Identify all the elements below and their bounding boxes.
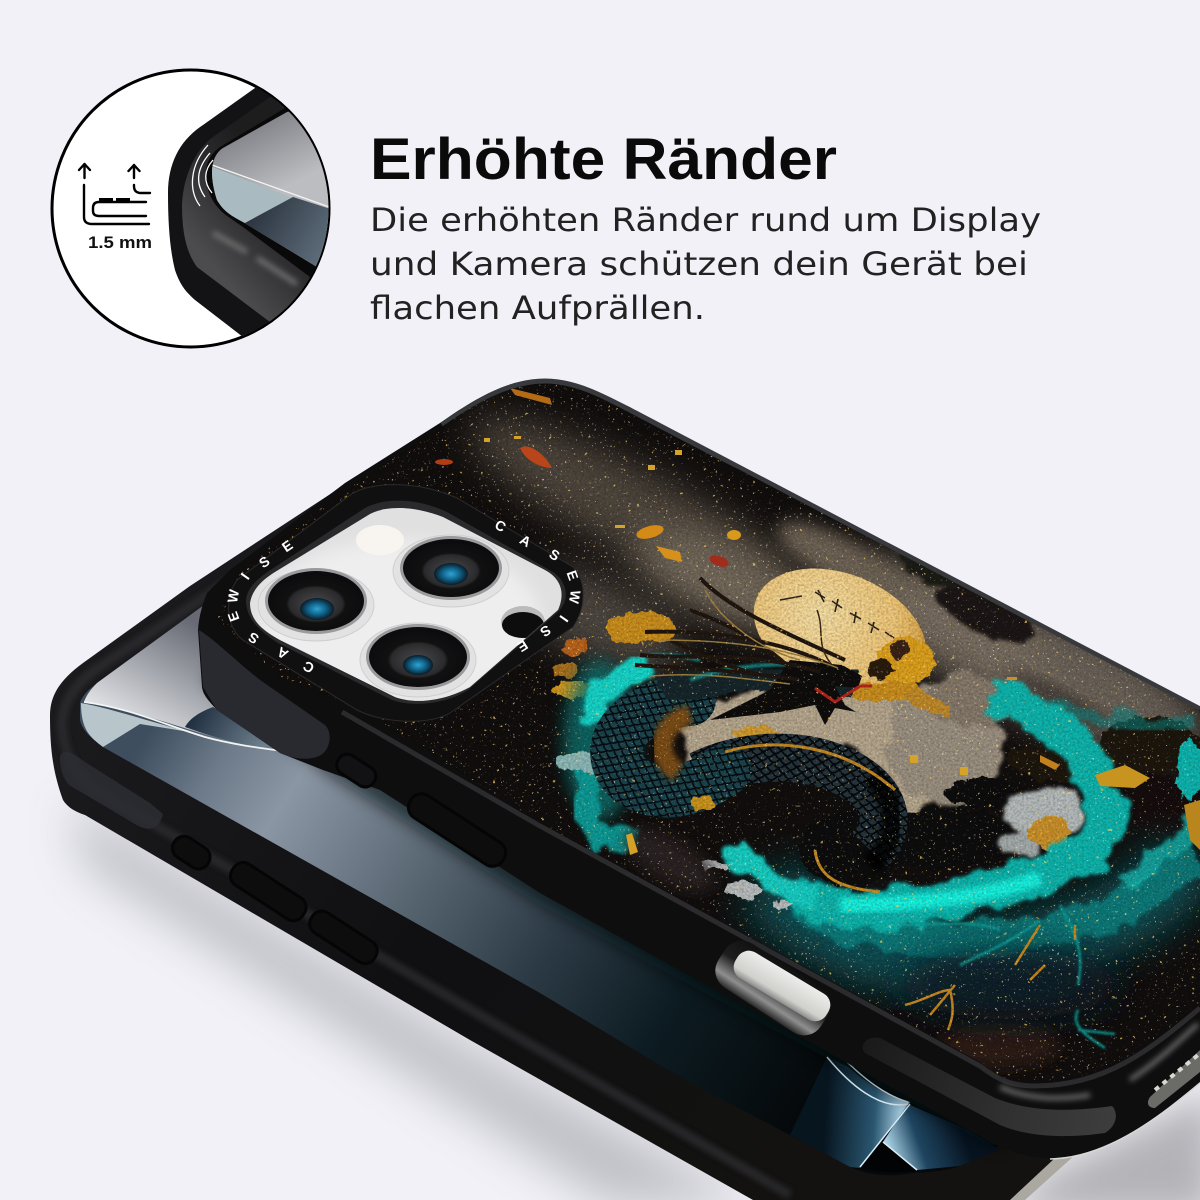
- lens top: [400, 536, 502, 600]
- circle white disc: [52, 70, 329, 347]
- dragon body lower curve: [700, 758, 884, 850]
- close-up phone corner: [168, 60, 345, 345]
- brand text: right side of ring: I: [556, 613, 572, 625]
- close-up gloss highlights: [213, 233, 297, 284]
- dragon brown belly: [662, 715, 690, 772]
- gold speckle: [200, 370, 1200, 1100]
- white spray: [703, 860, 792, 910]
- dragon hair gold highlights: [650, 590, 838, 684]
- dragon gold rims: [725, 745, 895, 892]
- front phone: black case with dragon artwork: [198, 370, 1200, 1159]
- dragon neck mane: [665, 674, 855, 695]
- brand text: right side of ring: W: [566, 589, 584, 606]
- display wallpaper: blue light panel left: [790, 1057, 910, 1168]
- flash: [356, 525, 404, 555]
- dark lower field with brown spots: [617, 818, 1120, 1067]
- brand text: right side of ring: S: [537, 622, 554, 641]
- camera ring outer: [229, 485, 583, 721]
- display wallpaper: white highlight curve: [84, 702, 282, 751]
- brand text: right side of ring: A: [517, 531, 534, 550]
- dragon body upper curve: [616, 700, 725, 791]
- charging port surround: [708, 933, 838, 1043]
- teal wave: bright core: [840, 878, 1040, 905]
- icon: raised edge height diagram: [79, 164, 150, 224]
- lens left ring: [258, 569, 374, 641]
- description text: [370, 201, 1041, 327]
- speaker edge on the right: [1148, 1050, 1200, 1108]
- pale foam top left: [556, 750, 594, 775]
- art base: [442, 386, 1199, 711]
- back phone button: volume up: [226, 858, 310, 925]
- dark area inside dragon coil: [800, 814, 900, 886]
- dragon artwork panel: [200, 370, 1200, 1100]
- back phone frame sheen: [62, 580, 790, 1195]
- frame lighter rim along the lower edge: [342, 712, 1200, 1086]
- icon label: 1.5 mm: [88, 233, 152, 252]
- gold splashes around moon: [551, 612, 952, 740]
- brand text: right side of ring: [492, 516, 584, 656]
- impact arcs: [192, 145, 213, 206]
- display wallpaper: black triangle: [860, 1142, 917, 1172]
- display wallpaper: blue light panel right: [883, 1104, 1000, 1170]
- thin light edge below front phone: [1050, 1083, 1200, 1159]
- lens left: [265, 568, 367, 634]
- teal wave: upper fan: [1000, 698, 1195, 725]
- phone behind: black case seen from the display side: [50, 470, 1075, 1200]
- white foam: [992, 784, 1087, 857]
- display wallpaper: bright curved lines: [827, 1057, 917, 1170]
- moon calligraphy strokes: [780, 590, 894, 638]
- brand text: right side of ring: S: [546, 545, 563, 564]
- back phone button: volume down: [305, 907, 381, 968]
- description text: Die erhöhten Ränder rund um Display: [370, 201, 1041, 239]
- lens top ring: [393, 535, 509, 607]
- camera ring inner slope: [246, 501, 566, 704]
- brand text: right side of ring: C: [492, 516, 509, 535]
- brand text: left side of ring: A: [274, 644, 291, 663]
- back phone carbon grip strip: [60, 752, 163, 829]
- teal wave: outer dark band: [795, 855, 1196, 940]
- teal wave at far right: [1177, 740, 1200, 800]
- white speckle: [200, 370, 1200, 1100]
- dragon body shade: [870, 775, 892, 865]
- gold claw: [694, 796, 716, 810]
- dragon mouth: [815, 686, 872, 702]
- beige cloud below moon: [680, 674, 1025, 815]
- front phone frame: [198, 379, 1200, 1158]
- brand text: left side of ring: W: [224, 587, 242, 604]
- dragon hair strands: [635, 578, 845, 680]
- teal glow left of dragon: [564, 660, 636, 820]
- back phone button: action: [168, 832, 214, 873]
- back phone bottom silver edge: [1010, 1155, 1075, 1200]
- moon whisker: [817, 610, 832, 665]
- display wallpaper: navy panel: [185, 707, 285, 752]
- camera module white plate: [240, 495, 580, 715]
- soft shadows below the phones: [70, 800, 1200, 1200]
- moon: [754, 568, 926, 685]
- teal glow beneath wave: [770, 860, 1190, 960]
- lens bottom ring: [360, 623, 476, 697]
- bottom corner grip strip: [863, 1037, 1116, 1136]
- brand text: right side of ring: E: [514, 637, 531, 656]
- front phone button: side button: [404, 789, 510, 871]
- teal wave: main swirl: [790, 695, 1107, 909]
- mane teal highlights: [650, 655, 820, 680]
- orange glow in foam: [1028, 816, 1072, 848]
- dark rocks: [875, 717, 1200, 868]
- brand text: left side of ring: C: [300, 658, 317, 677]
- teal tendrils low: [900, 905, 1115, 1048]
- lens bottom: [366, 624, 470, 690]
- detail circle: raised edge close-up: [52, 60, 345, 347]
- brand text: right side of ring: E: [564, 568, 582, 582]
- display wallpaper: pale area below the highlight: [81, 703, 190, 747]
- teal wave: right side streak: [1120, 815, 1195, 885]
- lidar sensor: [502, 612, 544, 638]
- gold veins low: [905, 925, 1075, 1030]
- microphone hole: [501, 606, 545, 638]
- brand text: left side of ring: E: [279, 537, 296, 555]
- brand text: left side of ring: E: [224, 610, 242, 624]
- brand text: left side of ring: S: [256, 553, 273, 571]
- translucent corner grip at camera: [199, 630, 330, 759]
- dragon head: [710, 660, 862, 725]
- heading: Erhöhte Ränder: [370, 127, 837, 192]
- brand text: left side of ring: S: [245, 629, 262, 648]
- frame outer top rim: [442, 381, 1200, 709]
- front phone button: mute switch: [333, 750, 380, 791]
- bottom corner gloss highlight: [1000, 1024, 1198, 1098]
- camera bump with CASEWISE ring: [224, 485, 584, 721]
- back phone display: [80, 580, 1010, 1175]
- shadow of front phone over display: [205, 600, 1020, 1150]
- texture grain: [200, 370, 1200, 1100]
- speaker holes: [1155, 1055, 1198, 1090]
- back phone frame: [50, 470, 1060, 1200]
- smoke layers: [453, 389, 1200, 774]
- display wallpaper: upper gray area: [84, 580, 300, 752]
- plate soft shading: [260, 540, 540, 700]
- charging port: [729, 946, 835, 1026]
- brand text: left side of ring: I: [237, 570, 253, 582]
- teal bright fan above neck: [590, 668, 650, 725]
- flakes of gold and red: [435, 388, 1200, 855]
- teal lower splash: [735, 845, 815, 900]
- brand text: left side of ring: [224, 537, 317, 677]
- description text: und Kamera schützen dein Gerät bei: [370, 245, 1028, 283]
- description text: flachen Aufprällen.: [370, 289, 705, 327]
- teal foam column left: [585, 765, 640, 840]
